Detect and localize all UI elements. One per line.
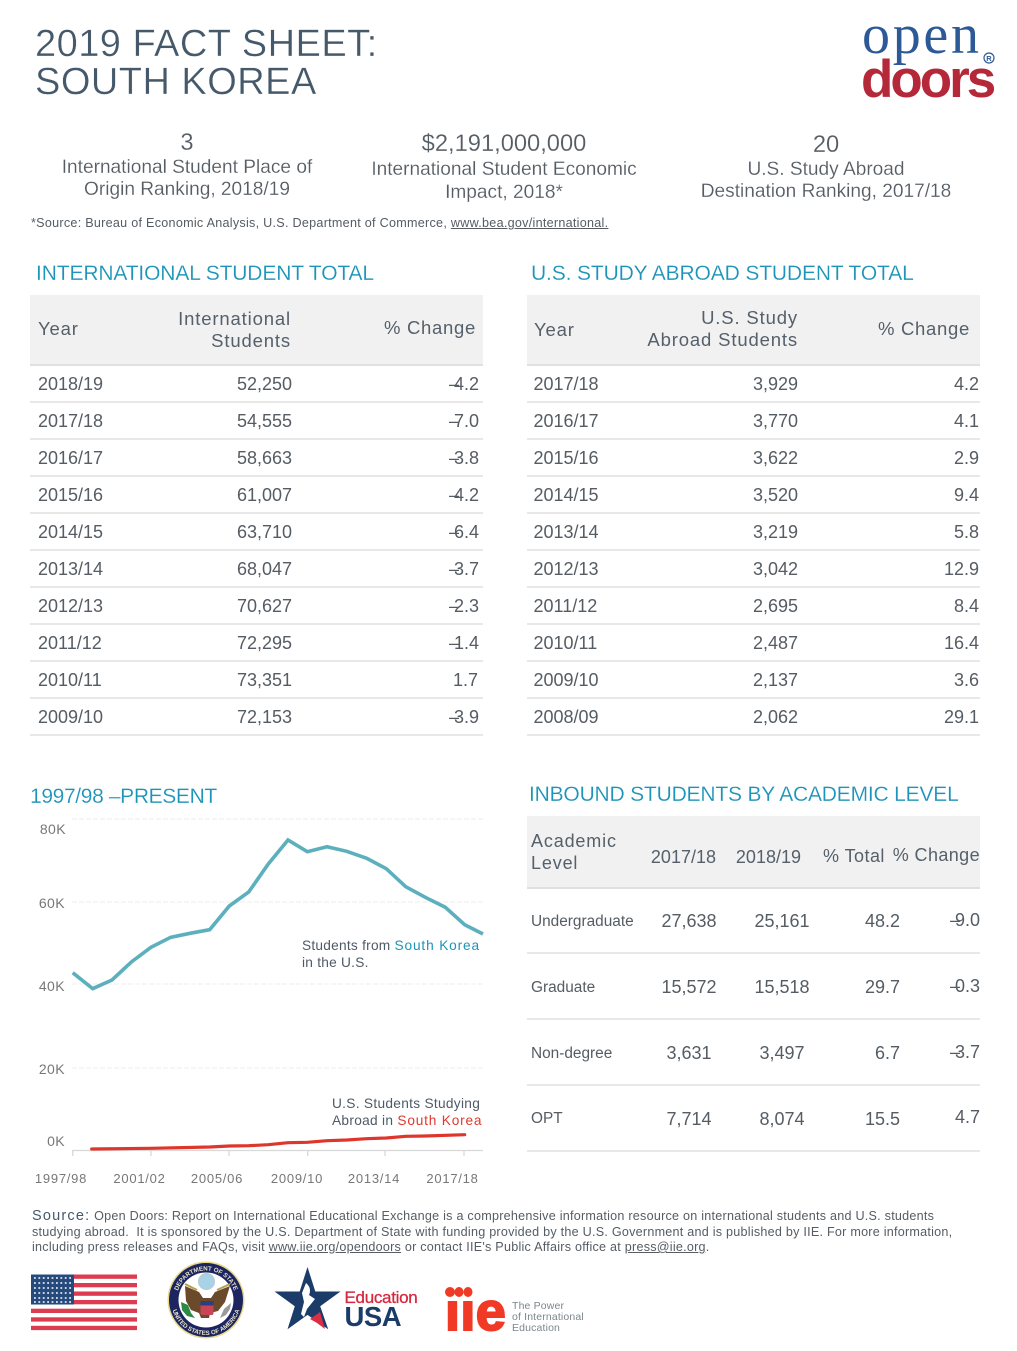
row 2016/17: 3,770 [753, 411, 798, 431]
row 2012/13: 2012/13 [38, 596, 103, 616]
y axis labels [39, 821, 66, 1149]
row OPT [527, 1086, 980, 1152]
row 2012/13: 70,627 [237, 596, 292, 616]
source note: *Source: Bureau of Economic Analysis, U.S. Department of Commerce, www.bea.gov/international. [31, 216, 608, 230]
panel: international student table [30, 295, 483, 736]
row 2011/12 [30, 625, 483, 662]
row 2012/13: 2012/13 [534, 559, 599, 579]
stat: study abroad destination ranking: Destination Ranking, 2017/18 [701, 181, 951, 202]
annotation: U.S. students abroad: U.S. Students Studying [332, 1096, 480, 1111]
row non-degree: 6.7 [875, 1043, 900, 1063]
table header: % Total [823, 846, 885, 866]
row 2014/15: 3,520 [753, 485, 798, 505]
table header: 2018/19 [736, 847, 801, 867]
row 2009/10: 72,153 [237, 707, 292, 727]
row 2017/18: 2017/18 [38, 411, 103, 431]
row 2011/12: 2,695 [753, 596, 798, 616]
row 2008/09 [527, 699, 980, 736]
row 2015/16: 3,622 [753, 448, 798, 468]
logo: EducationUSA wordmark [344, 1288, 417, 1332]
row 2013/14: 3,219 [753, 522, 798, 542]
row undergraduate: –9.0 [950, 910, 980, 930]
source text block: Source: Open Doors: Report on International Educational Exchange is a comprehensive information resource on international students and U.S. students [32, 1208, 934, 1224]
row non-degree: 3,631 [666, 1043, 712, 1063]
stat: place of origin ranking [62, 130, 312, 200]
source text block: studying abroad. It is sponsored by the U.S. Department of State with funding provided by the U.S. Government and is published by IIE. For more information, [32, 1224, 952, 1238]
row 2010/11: 2010/11 [534, 633, 597, 653]
row 2018/19: –4.2 [449, 374, 479, 394]
heading: inbound students by academic level: INBOUND STUDENTS BY ACADEMIC LEVEL [529, 783, 959, 806]
row 2018/19: 2018/19 [38, 374, 103, 394]
annotation: students from South Korea: South Korea [395, 938, 480, 953]
row 2010/11: 16.4 [944, 633, 979, 653]
row graduate: 15,572 [661, 977, 717, 997]
stat: place of origin ranking: International Student Place of [62, 157, 312, 178]
row 2016/17: 2016/17 [38, 448, 103, 468]
row 2013/14: 5.8 [954, 522, 979, 542]
row 2009/10: 3.6 [954, 670, 979, 690]
row graduate [527, 954, 980, 1020]
logo: EducationUSA wordmark: Education [344, 1288, 417, 1307]
x axis labels [35, 1171, 479, 1186]
panel: academic level table [527, 816, 980, 1152]
row 2008/09: 2,062 [753, 707, 798, 727]
row 2009/10 [30, 699, 483, 736]
row 2013/14 [30, 551, 483, 588]
row non-degree: –3.7 [950, 1042, 980, 1062]
row 2016/17: 4.1 [954, 411, 979, 431]
stat: economic impact: International Student Economic [371, 159, 637, 180]
row graduate: 15,518 [754, 977, 810, 997]
row 2017/18 [527, 366, 980, 403]
stat: economic impact: Impact, 2018* [445, 182, 563, 203]
row 2011/12 [527, 588, 980, 625]
row 2013/14 [527, 514, 980, 551]
stat: place of origin ranking: Origin Ranking, 2018/19 [84, 179, 290, 200]
row 2017/18: 3,929 [753, 374, 798, 394]
row 2018/19: 52,250 [237, 374, 292, 394]
table header: Abroad Students [647, 329, 798, 350]
row 2008/09: 29.1 [944, 707, 979, 727]
row 2015/16: –4.2 [449, 485, 479, 505]
line chart: students 1997/98 to present [35, 818, 484, 1186]
logo: EducationUSA wordmark: USA [344, 1301, 402, 1332]
row undergraduate: 27,638 [661, 911, 717, 931]
panel: study abroad table [527, 295, 980, 736]
x axis labels: 2005/06 [191, 1171, 243, 1186]
row 2015/16: 2015/16 [38, 485, 103, 505]
logo: Open Doors [861, 15, 995, 109]
icon: Department of State seal: DEPARTMENT OF STATE [174, 1266, 238, 1291]
row 2010/11: 2,487 [753, 633, 798, 653]
source text block [32, 1208, 952, 1254]
title: SOUTH KOREA [35, 61, 317, 103]
x axis labels: 1997/98 [35, 1171, 87, 1186]
table header [527, 295, 980, 366]
row 2016/17: 58,663 [237, 448, 292, 468]
row 2009/10: –3.9 [449, 707, 479, 727]
table header [30, 295, 483, 366]
stat: study abroad destination ranking: U.S. Study Abroad [747, 159, 905, 180]
row OPT: 8,074 [759, 1109, 805, 1129]
x axis labels: 2017/18 [426, 1171, 479, 1186]
y axis labels: 80K [40, 821, 66, 837]
IIE tagline: The Power [512, 1300, 564, 1312]
icon: EducationUSA star [274, 1267, 340, 1329]
row 2012/13: 3,042 [753, 559, 798, 579]
row 2012/13: 12.9 [944, 559, 979, 579]
heading: international student total: INTERNATIONAL STUDENT TOTAL [36, 262, 374, 285]
annotation: U.S. students abroad: South Korea [397, 1113, 482, 1128]
table header: Level [531, 853, 578, 873]
IIE tagline: of International [512, 1311, 584, 1323]
row 2017/18: 2017/18 [534, 374, 599, 394]
row graduate: –0.3 [950, 976, 980, 996]
table header: Year [38, 318, 79, 339]
row undergraduate: 25,161 [754, 911, 810, 931]
row 2014/15: –6.4 [449, 522, 479, 542]
IIE tagline: Education [512, 1322, 560, 1334]
row 2016/17 [527, 403, 980, 440]
row 2015/16 [527, 440, 980, 477]
table header: Academic [531, 831, 617, 851]
row 2017/18 [30, 403, 483, 440]
row 2009/10: 2,137 [753, 670, 798, 690]
icon: Department of State seal: UNITED STATES OF AMERICA [173, 1309, 240, 1335]
logos row [31, 1262, 584, 1342]
row 2010/11 [30, 662, 483, 699]
row 2015/16 [30, 477, 483, 514]
row 2012/13 [30, 588, 483, 625]
row 2009/10 [527, 662, 980, 699]
row OPT: 4.7 [955, 1107, 980, 1127]
row 2010/11: 1.7 [453, 670, 478, 690]
row 2017/18: –7.0 [449, 411, 479, 431]
table header: % Change [384, 317, 476, 338]
row 2013/14: 68,047 [237, 559, 292, 579]
line: U.S. students studying abroad in South Korea [92, 1135, 465, 1149]
logo: Open Doors: R [986, 54, 992, 63]
y axis labels: 40K [39, 978, 65, 994]
x axis labels: 2009/10 [271, 1171, 323, 1186]
stat: economic impact: $2,191,000,000 [422, 131, 586, 157]
x axis labels: 2013/14 [348, 1171, 400, 1186]
table header: % Change [878, 318, 970, 339]
table header: International [178, 308, 291, 329]
stat: place of origin ranking: 3 [180, 130, 194, 156]
row non-degree: Non-degree [531, 1045, 612, 1062]
row non-degree: 3,497 [759, 1043, 805, 1063]
title: 2019 FACT SHEET: [35, 23, 378, 65]
annotation: students from South Korea: Students from [302, 938, 395, 953]
row 2016/17: 2016/17 [534, 411, 599, 431]
row 2012/13: –2.3 [449, 596, 479, 616]
row 2011/12: –1.4 [449, 633, 479, 653]
row 2013/14: 2013/14 [534, 522, 599, 542]
row 2014/15 [30, 514, 483, 551]
stat: study abroad destination ranking: 20 [813, 132, 839, 158]
table header [527, 816, 980, 889]
row OPT: 7,714 [666, 1109, 712, 1129]
row OPT: OPT [531, 1110, 563, 1127]
row 2015/16: 61,007 [237, 485, 292, 505]
row 2014/15: 2014/15 [38, 522, 103, 542]
row 2013/14: 2013/14 [38, 559, 103, 579]
stat: study abroad destination ranking [701, 132, 951, 202]
logo: IIE: iie [445, 1282, 506, 1342]
row graduate: Graduate [531, 979, 595, 996]
line: students from South Korea in the U.S. [73, 840, 483, 989]
row 2017/18: 4.2 [954, 374, 979, 394]
row 2017/18: 54,555 [237, 411, 292, 431]
row 2011/12: 72,295 [237, 633, 292, 653]
heading: study abroad student total: U.S. STUDY ABROAD STUDENT TOTAL [531, 262, 914, 285]
row 2008/09: 2008/09 [534, 707, 599, 727]
row non-degree [527, 1020, 980, 1086]
row 2010/11: 73,351 [237, 670, 292, 690]
row 2014/15 [527, 477, 980, 514]
row undergraduate: 48.2 [865, 911, 900, 931]
table header: Students [211, 330, 291, 351]
y axis labels: 60K [39, 895, 65, 911]
y axis labels: 0K [47, 1133, 65, 1149]
row OPT: 15.5 [865, 1109, 900, 1129]
heading: 1997/98 to present: 1997/98 –PRESENT [30, 785, 217, 808]
row 2011/12: 2011/12 [38, 633, 102, 653]
stat: economic impact [371, 131, 637, 203]
table header: Year [534, 319, 575, 340]
row 2009/10: 2009/10 [38, 707, 103, 727]
row 2011/12: 2011/12 [534, 596, 597, 616]
table header: U.S. Study [701, 307, 798, 328]
x axis labels: 2001/02 [113, 1171, 166, 1186]
logo: Open Doors: doors [861, 50, 995, 109]
table header: 2017/18 [651, 847, 716, 867]
row 2015/16: 2.9 [954, 448, 979, 468]
row 2016/17 [30, 440, 483, 477]
row 2011/12: 8.4 [954, 596, 979, 616]
annotation: U.S. students abroad: Abroad in [332, 1113, 397, 1128]
y axis labels: 20K [39, 1061, 65, 1077]
row 2010/11 [527, 625, 980, 662]
icon: Department of State seal [168, 1262, 244, 1338]
row 2013/14: –3.7 [449, 559, 479, 579]
table header: % Change [893, 845, 980, 865]
row 2010/11: 2010/11 [38, 670, 102, 690]
row 2014/15: 2014/15 [534, 485, 599, 505]
icon: U.S. flag [31, 1274, 137, 1330]
row 2014/15: 9.4 [954, 485, 979, 505]
row 2014/15: 63,710 [237, 522, 292, 542]
row graduate: 29.7 [865, 977, 900, 997]
row undergraduate [527, 888, 980, 954]
title [35, 23, 378, 103]
annotation: students from South Korea: in the U.S. [302, 955, 369, 970]
row undergraduate: Undergraduate [531, 913, 634, 930]
source text block: including press releases and FAQs, visit www.iie.org/opendoors or contact IIE's Public Affairs office at press@iie.org. [32, 1240, 710, 1254]
row 2015/16: 2015/16 [534, 448, 599, 468]
row 2016/17: –3.8 [449, 448, 479, 468]
row 2012/13 [527, 551, 980, 588]
row 2009/10: 2009/10 [534, 670, 599, 690]
row 2018/19 [30, 366, 483, 403]
